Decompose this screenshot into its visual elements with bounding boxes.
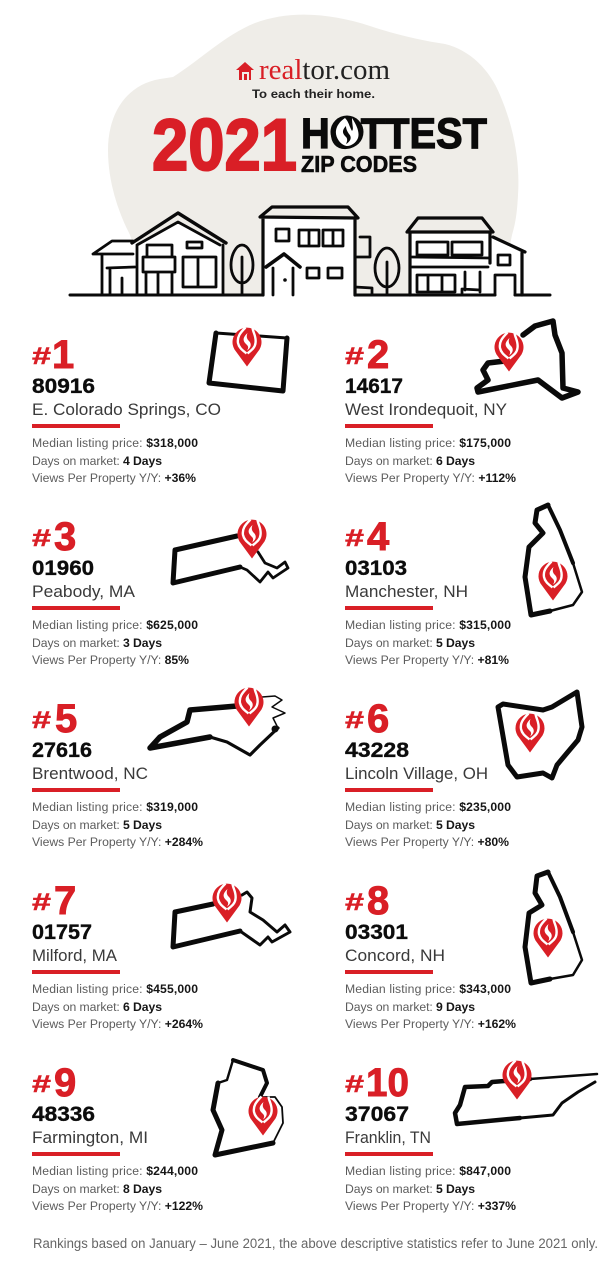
rank: 9 (54, 1061, 76, 1105)
stats: Median listing price: $625,000 (32, 618, 198, 632)
rank: # (345, 889, 364, 916)
stats (32, 800, 203, 849)
stats: Views Per Property Y/Y: +264% (32, 1017, 203, 1031)
stats: Median listing price: $847,000 (345, 1164, 511, 1178)
city: Peabody, MA (32, 583, 135, 601)
stats: Views Per Property Y/Y: +284% (32, 835, 203, 849)
title (152, 105, 487, 186)
icon: logo house (236, 62, 254, 80)
rank (32, 697, 77, 741)
panel: rank 9 (32, 1060, 283, 1213)
panel: rank 6 (345, 692, 582, 849)
city: E. Colorado Springs, CO (32, 401, 221, 419)
panel: rank 3 (32, 515, 288, 667)
stats: Median listing price: $343,000 (345, 982, 511, 996)
stats: Views Per Property Y/Y: +112% (345, 471, 516, 485)
stats: Days on market: 5 Days (345, 818, 475, 832)
stats (345, 436, 516, 485)
stats: Days on market: 6 Days (345, 454, 475, 468)
divider (32, 606, 120, 610)
stats (345, 982, 516, 1031)
stats (32, 982, 203, 1031)
rank: # (345, 1071, 364, 1098)
stats: Days on market: 4 Days (32, 454, 162, 468)
title year: 2021 (152, 105, 297, 186)
divider (345, 970, 433, 974)
stats: Median listing price: $318,000 (32, 436, 198, 450)
zip code: 37067 (345, 1102, 409, 1126)
city: Lincoln Village, OH (345, 765, 488, 783)
stats: Days on market: 5 Days (345, 636, 475, 650)
panel: rank 2 (345, 321, 578, 485)
rank: 6 (367, 697, 389, 741)
divider (32, 788, 120, 792)
map: Massachusetts (173, 520, 288, 583)
stats: Days on market: 5 Days (345, 1182, 475, 1196)
title hottest: HOTTEST (301, 110, 487, 158)
rank (32, 333, 74, 377)
rank: # (32, 1071, 51, 1098)
stats: Median listing price: $244,000 (32, 1164, 198, 1178)
rank: 1 (52, 333, 74, 377)
stats: Median listing price: $235,000 (345, 800, 511, 814)
stats (32, 618, 198, 667)
zip code: 27616 (32, 738, 92, 762)
map: Ohio (498, 692, 582, 778)
stats: Days on market: 6 Days (32, 1000, 162, 1014)
panel: rank 4 (345, 505, 582, 667)
rank (345, 879, 389, 923)
rank: 4 (367, 515, 390, 559)
stats: Views Per Property Y/Y: +337% (345, 1199, 516, 1213)
rank: # (32, 525, 51, 552)
stats: Days on market: 8 Days (32, 1182, 162, 1196)
rank: 7 (54, 879, 76, 923)
rank: # (345, 707, 364, 734)
map: New Hampshire (525, 505, 582, 615)
stats: Views Per Property Y/Y: +36% (32, 471, 196, 485)
stats: Views Per Property Y/Y: +81% (345, 653, 509, 667)
panel: rank 8 (345, 872, 582, 1031)
rank: 5 (55, 697, 77, 741)
stats (32, 1164, 203, 1213)
zip code: 03301 (345, 920, 408, 944)
map: Tennessee (455, 1060, 597, 1124)
rank (345, 515, 390, 559)
rank (345, 1061, 409, 1105)
stats: Median listing price: $175,000 (345, 436, 511, 450)
city: West Irondequoit, NY (345, 401, 507, 419)
rank (345, 697, 389, 741)
rank: # (345, 525, 364, 552)
rank (32, 879, 76, 923)
panel: rank 1 (32, 328, 287, 485)
city: Concord, NH (345, 947, 445, 965)
rank: # (32, 707, 51, 734)
stats: Views Per Property Y/Y: 85% (32, 653, 189, 667)
stats: Views Per Property Y/Y: +162% (345, 1017, 516, 1031)
map: New York (477, 321, 578, 398)
rank: # (32, 343, 51, 370)
divider (345, 606, 433, 610)
rank: 3 (54, 515, 76, 559)
zip code: 80916 (32, 374, 95, 398)
stats: Median listing price: $315,000 (345, 618, 511, 632)
header blob (108, 15, 518, 295)
zip code: 03103 (345, 556, 407, 580)
rank (32, 515, 76, 559)
stats (32, 436, 198, 485)
rank (32, 1061, 76, 1105)
stats: Median listing price: $455,000 (32, 982, 198, 996)
divider (345, 1152, 433, 1156)
zip code: 14617 (345, 374, 403, 398)
stats (345, 1164, 516, 1213)
city: Farmington, MI (32, 1129, 148, 1147)
stats: Days on market: 5 Days (32, 818, 162, 832)
icon: flame in O (330, 116, 364, 148)
tagline: To each their home. (252, 89, 375, 101)
zip code: 01960 (32, 556, 94, 580)
stats: Median listing price: $319,000 (32, 800, 198, 814)
rank: # (32, 889, 51, 916)
city: Franklin, TN (345, 1129, 431, 1147)
divider (345, 788, 433, 792)
zip code: 01757 (32, 920, 92, 944)
divider (345, 424, 433, 428)
panel: rank 5 (32, 688, 285, 849)
zip code: 48336 (32, 1102, 95, 1126)
stats: Days on market: 3 Days (32, 636, 162, 650)
illustration: row of houses (70, 207, 550, 295)
divider (32, 970, 120, 974)
map: Colorado (209, 328, 287, 391)
map: Michigan (213, 1060, 283, 1155)
rank: # (345, 343, 364, 370)
rank: 8 (367, 879, 389, 923)
rank (345, 333, 389, 377)
city: Milford, MA (32, 947, 117, 965)
title zip codes: ZIP CODES (301, 151, 417, 177)
stats: Views Per Property Y/Y: +80% (345, 835, 509, 849)
footnote: Rankings based on January – June 2021, the above descriptive statistics refer to June 2021 only. (33, 1236, 598, 1251)
stats: Views Per Property Y/Y: +122% (32, 1199, 203, 1213)
city: Manchester, NH (345, 583, 468, 601)
divider (32, 424, 120, 428)
rank: 10 (366, 1061, 409, 1105)
zip code: 43228 (345, 738, 409, 762)
divider (32, 1152, 120, 1156)
rank: 2 (367, 333, 389, 377)
stats (345, 618, 511, 667)
map: New Hampshire (525, 872, 582, 983)
panel: rank 10 (345, 1060, 597, 1213)
map: North Carolina (150, 688, 285, 755)
panel: rank 7 (32, 879, 290, 1031)
stats (345, 800, 511, 849)
stats: Days on market: 9 Days (345, 1000, 475, 1014)
map: Massachusetts (173, 884, 290, 947)
logo wordmark: realtor.com (259, 54, 390, 86)
city: Brentwood, NC (32, 765, 148, 783)
realtor.com logo (236, 54, 390, 86)
